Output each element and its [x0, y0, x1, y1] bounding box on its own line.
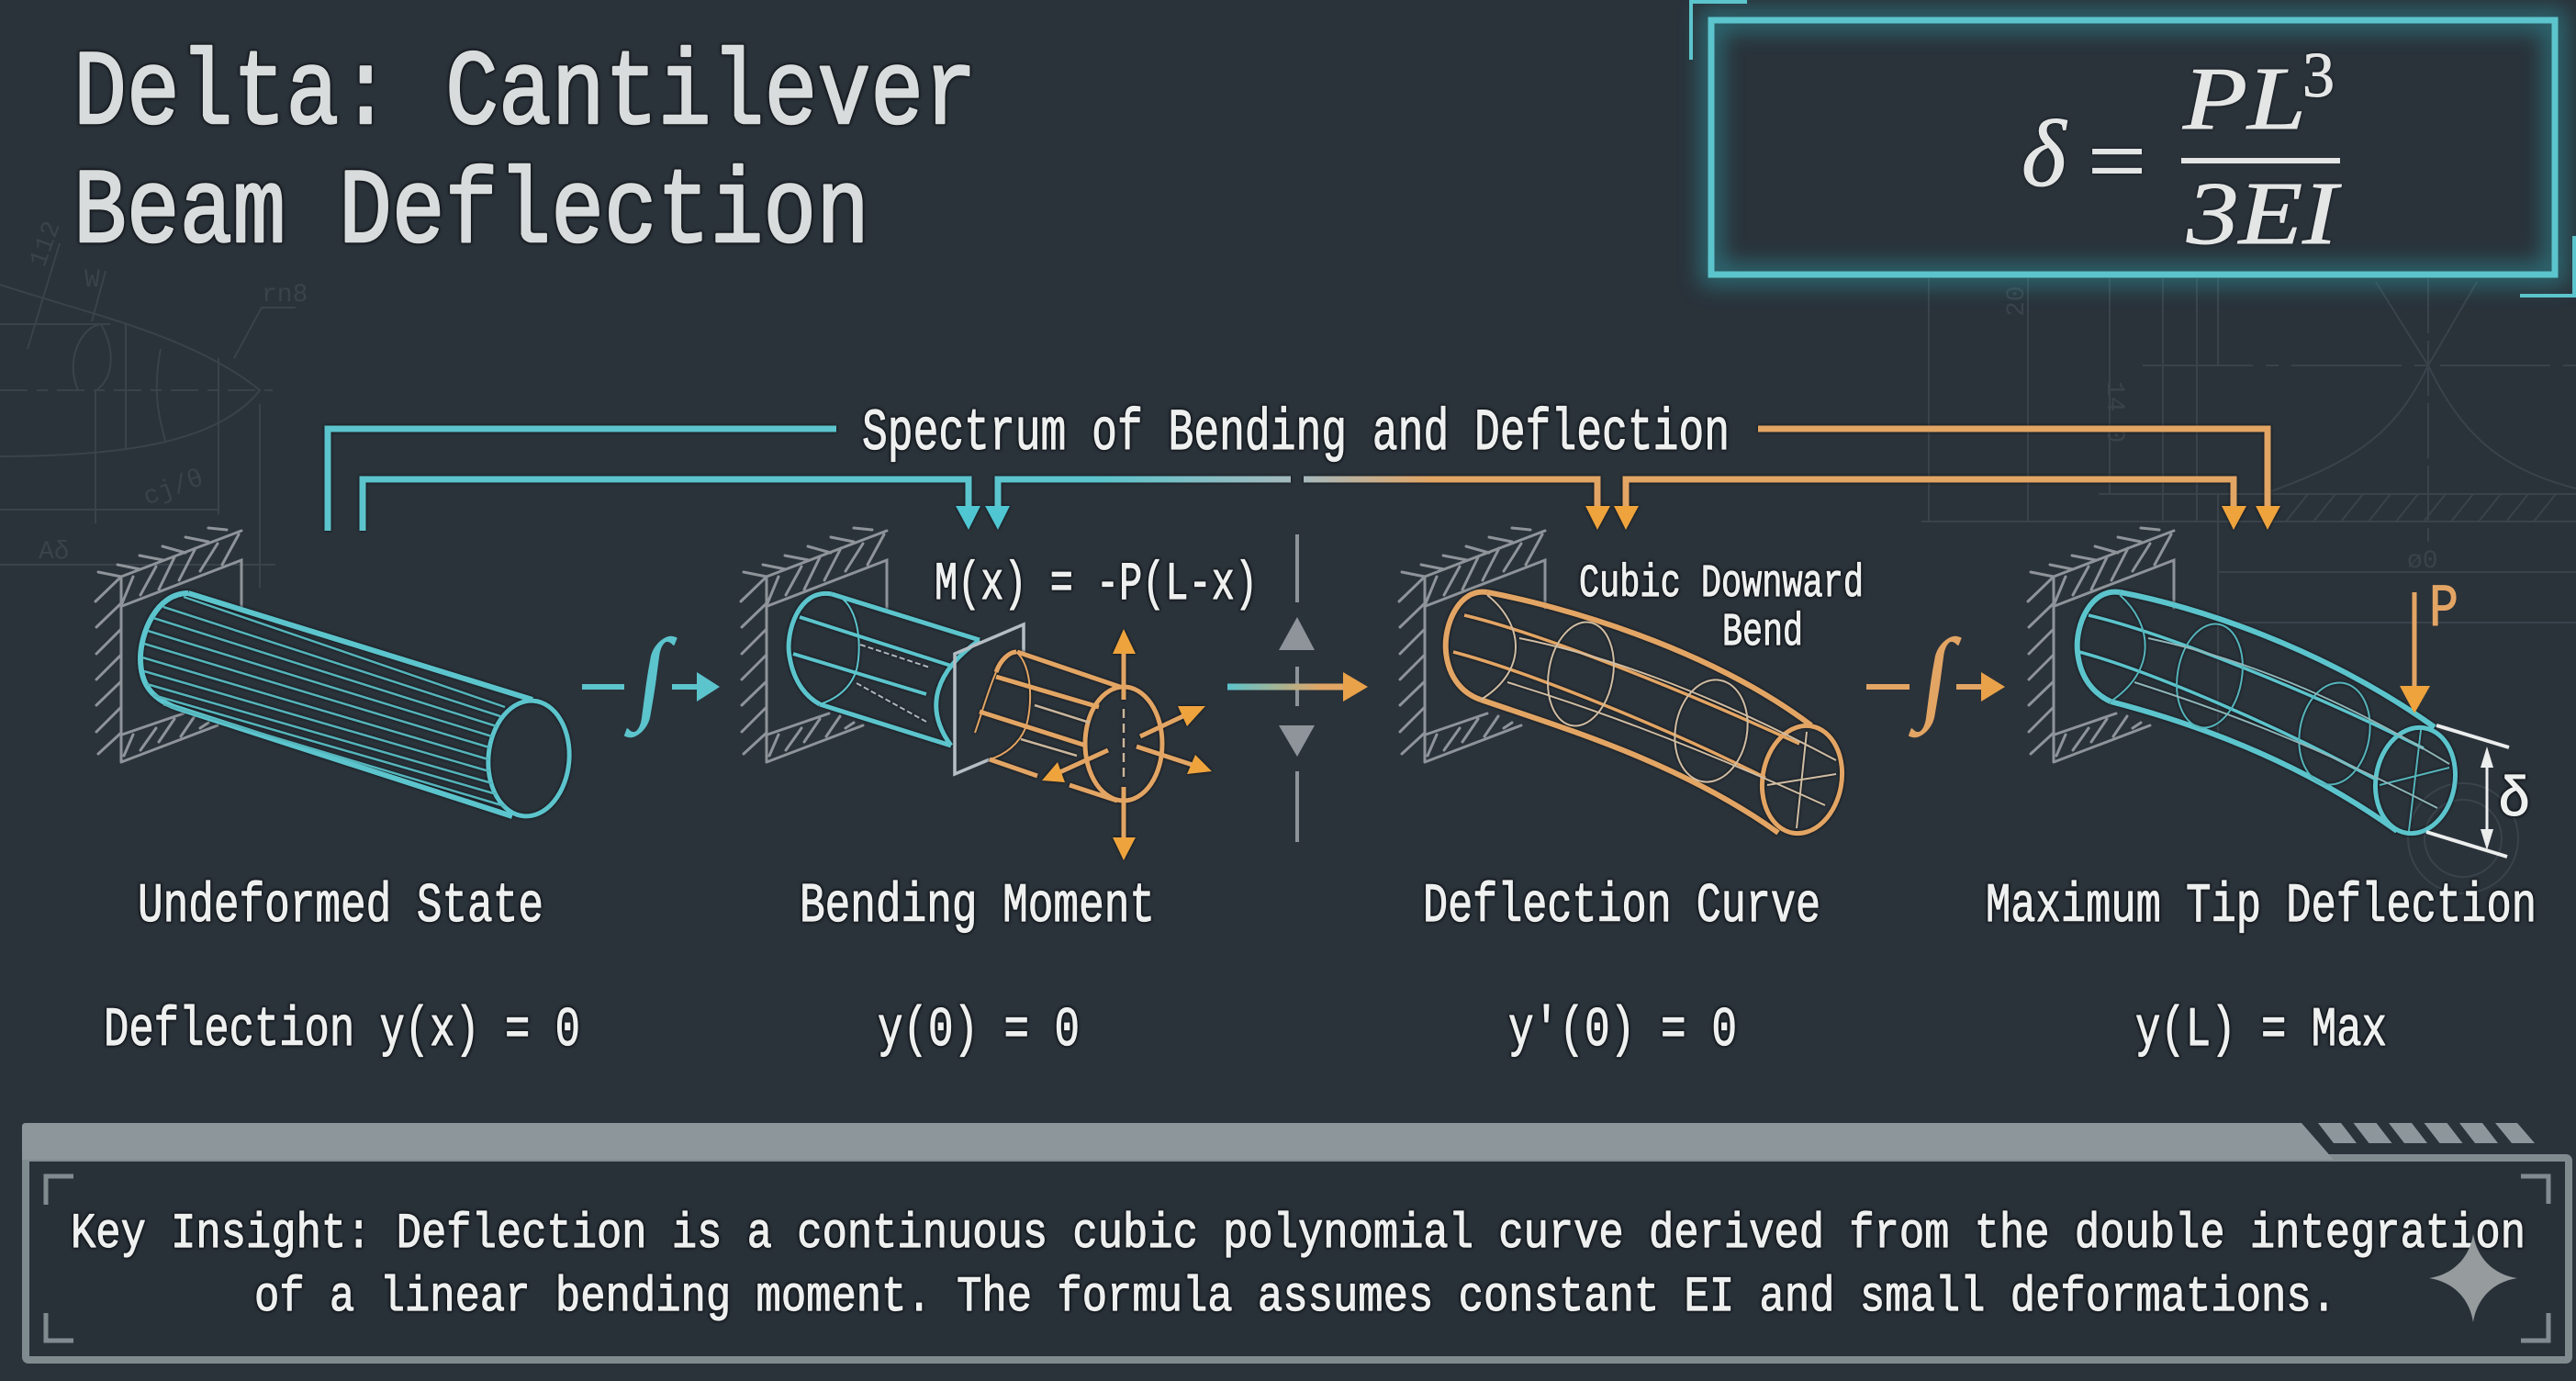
- formula text: δ: [2022, 101, 2067, 207]
- faint blueprint drawing: left: cj/θ: [140, 465, 207, 512]
- faint blueprint drawing: right: 20: [2003, 286, 2032, 317]
- faint blueprint drawing: left: 112: [25, 218, 68, 271]
- icon: orange bent beam: [1446, 592, 1851, 840]
- faint blueprint drawing: right: 14 0: [2100, 381, 2128, 443]
- title: [73, 34, 977, 274]
- icon: teal bent beam: [2078, 592, 2463, 840]
- moment equation: M(x) = -P(L-x): [935, 556, 1258, 615]
- formula text: =: [2088, 108, 2146, 214]
- key insight panel: [22, 1123, 2569, 1360]
- faint blueprint drawing: left: W: [84, 266, 100, 295]
- annotation: cubic downward bend: Bend: [1722, 607, 1803, 659]
- stage labels: Undeformed State: [138, 876, 543, 938]
- insight text: [71, 1207, 2526, 1326]
- stage labels: Deflection Curve: [1423, 876, 1820, 938]
- central divider with arrow: [1227, 534, 1368, 842]
- icon: cylinder beam: [140, 593, 574, 820]
- stage 3: deflection curve: [1399, 528, 1864, 840]
- stage labels: Bending Moment: [800, 876, 1155, 938]
- deflection dimension delta: [2426, 725, 2529, 857]
- stage equations: Deflection y(x) = 0: [104, 1000, 580, 1062]
- spectrum heading: Spectrum of Bending and Deflection: [862, 401, 1730, 467]
- integral arrow 2: [1866, 619, 2005, 738]
- inner corner marks: [46, 1176, 2548, 1341]
- icon: teal beam section: [789, 593, 980, 746]
- faint blueprint drawing: right: [1921, 278, 2576, 893]
- stage equations: y(L) = Max: [2135, 1000, 2387, 1062]
- annotation: cubic downward bend: [1579, 558, 1864, 659]
- title: Delta: Cantilever: [73, 34, 977, 155]
- integral arrow 1: ∫: [624, 619, 680, 738]
- faint blueprint drawing: right: ø0: [2407, 547, 2438, 576]
- formula panel: [1691, 2, 2574, 296]
- icon: section plane: [955, 624, 1024, 774]
- formula text: [2022, 40, 2342, 264]
- formula text: 3: [2302, 40, 2335, 111]
- panel frame: [26, 1158, 2569, 1360]
- stage equations: y'(0) = 0: [1508, 1000, 1737, 1062]
- icon: fixed wall: [1399, 528, 1545, 762]
- load arrow P: [2400, 575, 2458, 713]
- formula text: 3EI: [2186, 164, 2342, 264]
- header stripes: [2318, 1123, 2535, 1143]
- panel header bar: [22, 1123, 2334, 1160]
- deflection dimension delta: δ: [2499, 766, 2529, 827]
- faint blueprint drawing: left: rn8: [262, 281, 308, 309]
- stage 4: maximum tip deflection: [2028, 528, 2529, 857]
- stage 1: undeformed beam: [95, 528, 574, 820]
- stage 2: bending moment: [741, 528, 1258, 860]
- integral arrow 2: ∫: [1909, 619, 1965, 738]
- annotation: cubic downward bend: Cubic Downward: [1579, 558, 1864, 611]
- integral arrow 1: [582, 619, 720, 738]
- stage labels: [138, 876, 2537, 938]
- icon: fixed wall: [741, 528, 887, 762]
- load arrow P: P: [2429, 575, 2458, 644]
- icon: fixed wall: [95, 528, 241, 762]
- stage equations: [104, 1000, 2387, 1062]
- bracket arrows: orange: [1304, 429, 2280, 530]
- icon: fixed wall: [2028, 528, 2174, 762]
- stage equations: y(0) = 0: [878, 1000, 1080, 1062]
- icon: sparkle: [2429, 1234, 2517, 1322]
- icon: orange cut section with force arrows: [975, 629, 1212, 860]
- formula text: PL: [2182, 50, 2306, 149]
- faint blueprint drawing: left: Aδ: [39, 538, 70, 567]
- bracket arrows: teal: [328, 429, 1291, 531]
- faint blueprint drawing: left: [0, 218, 308, 588]
- title: Beam Deflection: [73, 152, 869, 274]
